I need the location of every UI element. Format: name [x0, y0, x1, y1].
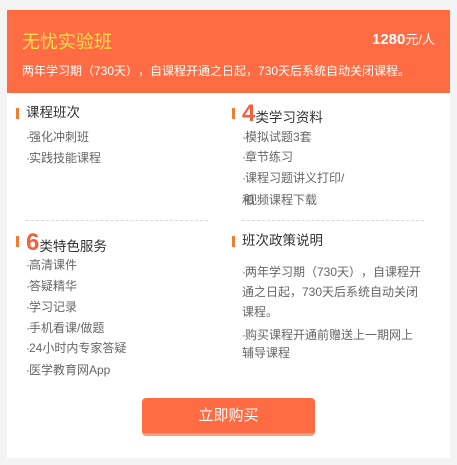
services list: ·24小时内专家答疑 [26, 341, 126, 355]
services list: ·答疑精华 [26, 279, 77, 293]
policy text: ·购买课程开通前赠送上一期网上 [242, 328, 413, 342]
panel: special services [16, 229, 126, 377]
accent bar [232, 236, 235, 247]
materials list [242, 130, 344, 207]
panel: course types [16, 105, 101, 165]
course list [26, 130, 101, 165]
panel: study materials [232, 100, 344, 207]
panel: policy notes [232, 233, 421, 360]
services list: ·学习记录 [26, 300, 77, 314]
materials list: ·课程习题讲义打印/ [242, 171, 344, 185]
policy text: ·两年学习期（730天），自课程开 [242, 265, 421, 279]
materials list: ·视频课程下载 [242, 193, 317, 207]
heading: 班次政策说明 [242, 233, 323, 248]
services list [26, 258, 126, 377]
policy text: 辅导课程 [242, 346, 290, 360]
course list: ·实践技能课程 [26, 151, 101, 165]
materials list: 和 [242, 193, 254, 207]
policy text [242, 265, 421, 360]
plan title: 无忧实验班 [22, 32, 112, 52]
price: 1280元/人 [372, 31, 435, 48]
heading: 4类学习资料 [242, 100, 323, 127]
materials list: ·章节练习 [242, 150, 293, 164]
course list: ·强化冲刺班 [26, 130, 89, 144]
plan summary: 两年学习期（730天），自课程开通之日起，730天后系统自动关闭课程。 [22, 64, 410, 78]
policy text: 课程。 [242, 305, 278, 319]
policy text: 通之日起，730天后系统自动关闭 [242, 285, 418, 299]
heading: 课程班次 [26, 105, 80, 120]
accent bar [16, 108, 19, 119]
buy button [142, 398, 315, 436]
header banner [7, 10, 450, 93]
accent bar [232, 108, 235, 119]
services list: ·手机看课/做题 [26, 321, 104, 335]
materials list: ·模拟试题3套 [242, 130, 312, 144]
buy button: 立即购买 [198, 407, 258, 424]
services list: ·医学教育网App [26, 363, 110, 377]
services list: ·高清课件 [26, 258, 77, 272]
heading: 6类特色服务 [26, 229, 107, 256]
accent bar [16, 236, 19, 247]
